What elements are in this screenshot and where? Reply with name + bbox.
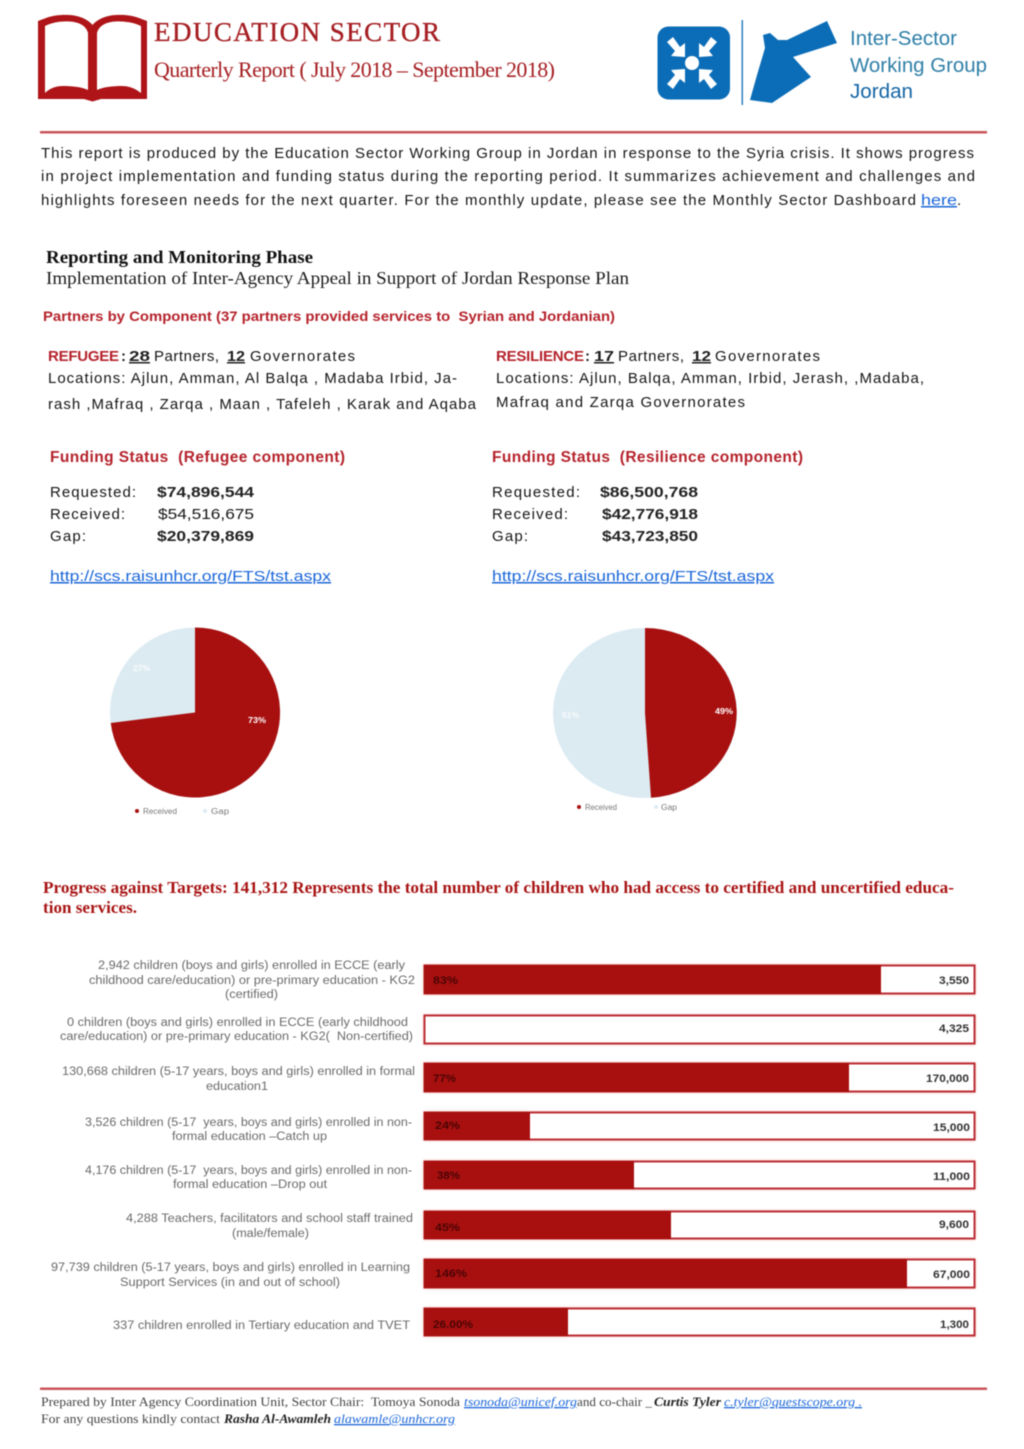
- panel: refugee funding status: [50, 449, 345, 585]
- panel: refugee partners: Partners,: [154, 348, 219, 365]
- panel: resilience funding status: Funding Status (Resilience component): [492, 449, 803, 466]
- panel: resilience funding status: [492, 449, 803, 585]
- panel: resilience funding status: Requested:: [492, 484, 580, 501]
- intro paragraph: here: [921, 192, 957, 209]
- panel: refugee funding status: $20,379,869: [157, 528, 254, 545]
- row: learning support: Support Services (in and out of school): [120, 1277, 340, 1289]
- icon: converging arrows: [658, 26, 730, 100]
- row: drop out: 38%: [437, 1170, 460, 1182]
- row: drop out: 11,000: [933, 1171, 970, 1183]
- panel: resilience partners: 12: [692, 348, 711, 365]
- pie chart: refugee funding: [110, 628, 280, 816]
- intro paragraph: highlights foreseen needs for the next quarter. For the monthly update, please see the Monthly Sector Dashboard: [41, 192, 916, 209]
- title: EDUCATION SECTOR: [154, 17, 440, 47]
- footer: contacts: Curtis Tyler: [654, 1394, 722, 1409]
- footer: contacts: Prepared by Inter Agency Coordination Unit, Sector Chair: Tomoya Sonoda: [41, 1394, 460, 1409]
- panel: resilience partners: RESILIENCE: [496, 348, 584, 365]
- row: drop out: 4,176 children (5-17 years, boys and girls) enrolled in non-: [85, 1165, 412, 1177]
- panel: refugee funding status: Gap:: [50, 528, 86, 545]
- panel: resilience funding status: Received:: [492, 506, 568, 523]
- row: teachers trained: 4,288 Teachers, facilitators and school staff trained: [126, 1213, 413, 1225]
- row: ECCE non-certified: [60, 1016, 974, 1044]
- panel: resilience partners: 17: [594, 348, 614, 365]
- row: formal education: [62, 1063, 974, 1093]
- row: formal education: 77%: [433, 1073, 456, 1085]
- row: formal education: 170,000: [926, 1073, 969, 1085]
- row: catch up: 15,000: [933, 1122, 970, 1134]
- heading: progress against targets: [43, 878, 954, 917]
- row: catch up: 3,526 children (5-17 years, boys and girls) enrolled in non-: [85, 1117, 412, 1129]
- footer: contacts: [41, 1394, 862, 1426]
- row: learning support: 146%: [435, 1268, 467, 1280]
- heading: reporting and monitoring phase: [46, 247, 629, 288]
- row: ECCE non-certified: 0 children (boys and girls) enrolled in ECCE (early childhood: [67, 1017, 408, 1029]
- icon: open book: [38, 15, 147, 102]
- panel: refugee funding status: Requested:: [50, 484, 136, 501]
- panel: resilience funding status: $42,776,918: [602, 506, 698, 523]
- logo text: [850, 28, 987, 103]
- row: tertiary: 26.00%: [433, 1319, 473, 1331]
- row: teachers trained: (male/female): [232, 1228, 309, 1240]
- panel: refugee partners: 28: [129, 348, 150, 365]
- row: ECCE certified: (certified): [225, 989, 278, 1001]
- panel: refugee partners: rash ,Mafraq , Zarqa , Maan , Tafeleh , Karak and Aqaba: [48, 396, 477, 413]
- logo: inter-sector working group jordan: [658, 20, 987, 105]
- row: tertiary: [113, 1308, 974, 1336]
- footer: contacts: c.tyler@questscope.org .: [724, 1394, 862, 1409]
- row: ECCE certified: 3,550: [939, 975, 969, 987]
- footer: contacts: alawamle@unhcr.org: [334, 1411, 456, 1426]
- pie chart: refugee funding: 73%: [248, 716, 266, 725]
- panel: refugee partners: Locations: Ajlun, Amman, Al Balqa , Madaba Irbid, Ja-: [48, 370, 457, 387]
- pie chart: resilience funding: 51%: [562, 711, 579, 720]
- footer: contacts: Rasha Al-Awamleh: [223, 1411, 331, 1426]
- row: ECCE non-certified: 4,325: [939, 1023, 969, 1035]
- panel: refugee funding status: http://scs.raisunhcr.org/FTS/tst.aspx: [50, 568, 332, 585]
- panel: resilience funding status: Gap:: [492, 528, 528, 545]
- footer: contacts: tsonoda@unicef.org: [464, 1394, 578, 1409]
- heading: progress against targets: tion services.: [43, 898, 137, 917]
- subtitle: reporting period: Quarterly Report ( July 2018 – September 2018): [154, 57, 555, 82]
- intro paragraph: [41, 145, 975, 209]
- logo text: Jordan: [850, 81, 913, 103]
- heading: reporting and monitoring phase: Reporting and Monitoring Phase: [46, 247, 313, 267]
- panel: refugee partners: Governorates: [250, 348, 355, 365]
- row: ECCE certified: 2,942 children (boys and girls) enrolled in ECCE (early: [98, 960, 405, 972]
- panel: refugee partners: 12: [227, 348, 245, 365]
- row: ECCE non-certified: care/education) or pre-primary education - KG2( Non-certified): [60, 1031, 413, 1043]
- row: ECCE certified: [89, 960, 974, 1001]
- row: ECCE certified: childhood care/education) or pre-primary education - KG2: [89, 975, 415, 987]
- pie chart: resilience funding: Received: [585, 803, 617, 812]
- row: teachers trained: 9,600: [939, 1219, 969, 1231]
- pie chart: refugee funding: Gap: [211, 807, 230, 816]
- row: learning support: [51, 1259, 974, 1289]
- row: drop out: [85, 1161, 974, 1191]
- panel: resilience partners: Governorates: [715, 348, 820, 365]
- row: drop out: formal education –Drop out: [173, 1179, 328, 1191]
- footer: contacts: and co-chair _: [577, 1394, 652, 1409]
- intro paragraph: in project implementation and funding status during the reporting period. It summarizes achievement and challenges and: [41, 168, 975, 185]
- footer: contacts: For any questions kindly contact: [41, 1411, 220, 1426]
- panel: refugee partners: :: [121, 348, 126, 365]
- intro paragraph: .: [957, 192, 961, 209]
- pie chart: refugee funding: Received: [143, 807, 177, 816]
- heading: partners by component: Partners by Component (37 partners provided services to Syrian and Jordanian): [43, 308, 615, 324]
- panel: resilience funding status: $86,500,768: [600, 484, 698, 501]
- panel: resilience partners: Partners,: [618, 348, 684, 365]
- row: learning support: 97,739 children (5-17 years, boys and girls) enrolled in Learning: [51, 1262, 410, 1274]
- panel: refugee partners: [48, 348, 477, 413]
- row: teachers trained: [126, 1211, 974, 1240]
- pie chart: resilience funding: Gap: [661, 803, 678, 812]
- panel: refugee partners: REFUGEE: [48, 348, 119, 365]
- row: catch up: 24%: [435, 1120, 460, 1132]
- panel: refugee funding status: $54,516,675: [158, 506, 254, 523]
- panel: resilience partners: Mafraq and Zarqa Governorates: [496, 394, 745, 411]
- panel: resilience funding status: http://scs.raisunhcr.org/FTS/tst.aspx: [492, 568, 775, 585]
- row: learning support: 67,000: [933, 1269, 970, 1281]
- panel: resilience funding status: $43,723,850: [602, 528, 698, 545]
- heading: progress against targets: Progress against Targets: 141,312 Represents the total number of children who had access to certified and uncertified educa-: [43, 878, 954, 897]
- heading: reporting and monitoring phase: Implementation of Inter-Agency Appeal in Support of Jordan Response Plan: [46, 268, 629, 288]
- intro paragraph: This report is produced by the Education Sector Working Group in Jordan in response to the Syria crisis. It shows progress: [41, 145, 974, 162]
- bar chart: progress against targets: [51, 960, 974, 1336]
- row: catch up: [85, 1112, 974, 1143]
- logo text: Working Group: [850, 55, 987, 77]
- row: catch up: formal education –Catch up: [172, 1131, 327, 1143]
- row: teachers trained: 45%: [435, 1222, 460, 1234]
- panel: refugee funding status: Funding Status (Refugee component): [50, 449, 345, 466]
- pie chart: refugee funding: 27%: [133, 664, 150, 673]
- row: formal education: 130,668 children (5-17 years, boys and girls) enrolled in formal: [62, 1066, 415, 1078]
- panel: resilience partners: Locations: Ajlun, Balqa, Amman, Irbid, Jerash, ,Madaba,: [496, 370, 924, 387]
- row: ECCE certified: 83%: [433, 975, 458, 987]
- panel: resilience partners: [496, 348, 924, 411]
- row: formal education: education1: [206, 1081, 268, 1093]
- panel: resilience partners: :: [585, 348, 590, 365]
- panel: refugee funding status: Received:: [50, 506, 125, 523]
- pie chart: resilience funding: [553, 628, 737, 812]
- row: tertiary: 1,300: [940, 1319, 969, 1331]
- row: tertiary: 337 children enrolled in Tertiary education and TVET: [113, 1320, 410, 1332]
- pie chart: resilience funding: 49%: [715, 707, 733, 716]
- panel: refugee funding status: $74,896,544: [157, 484, 255, 501]
- logo text: Inter-Sector: [850, 28, 957, 50]
- icon: map of jordan: [750, 21, 837, 103]
